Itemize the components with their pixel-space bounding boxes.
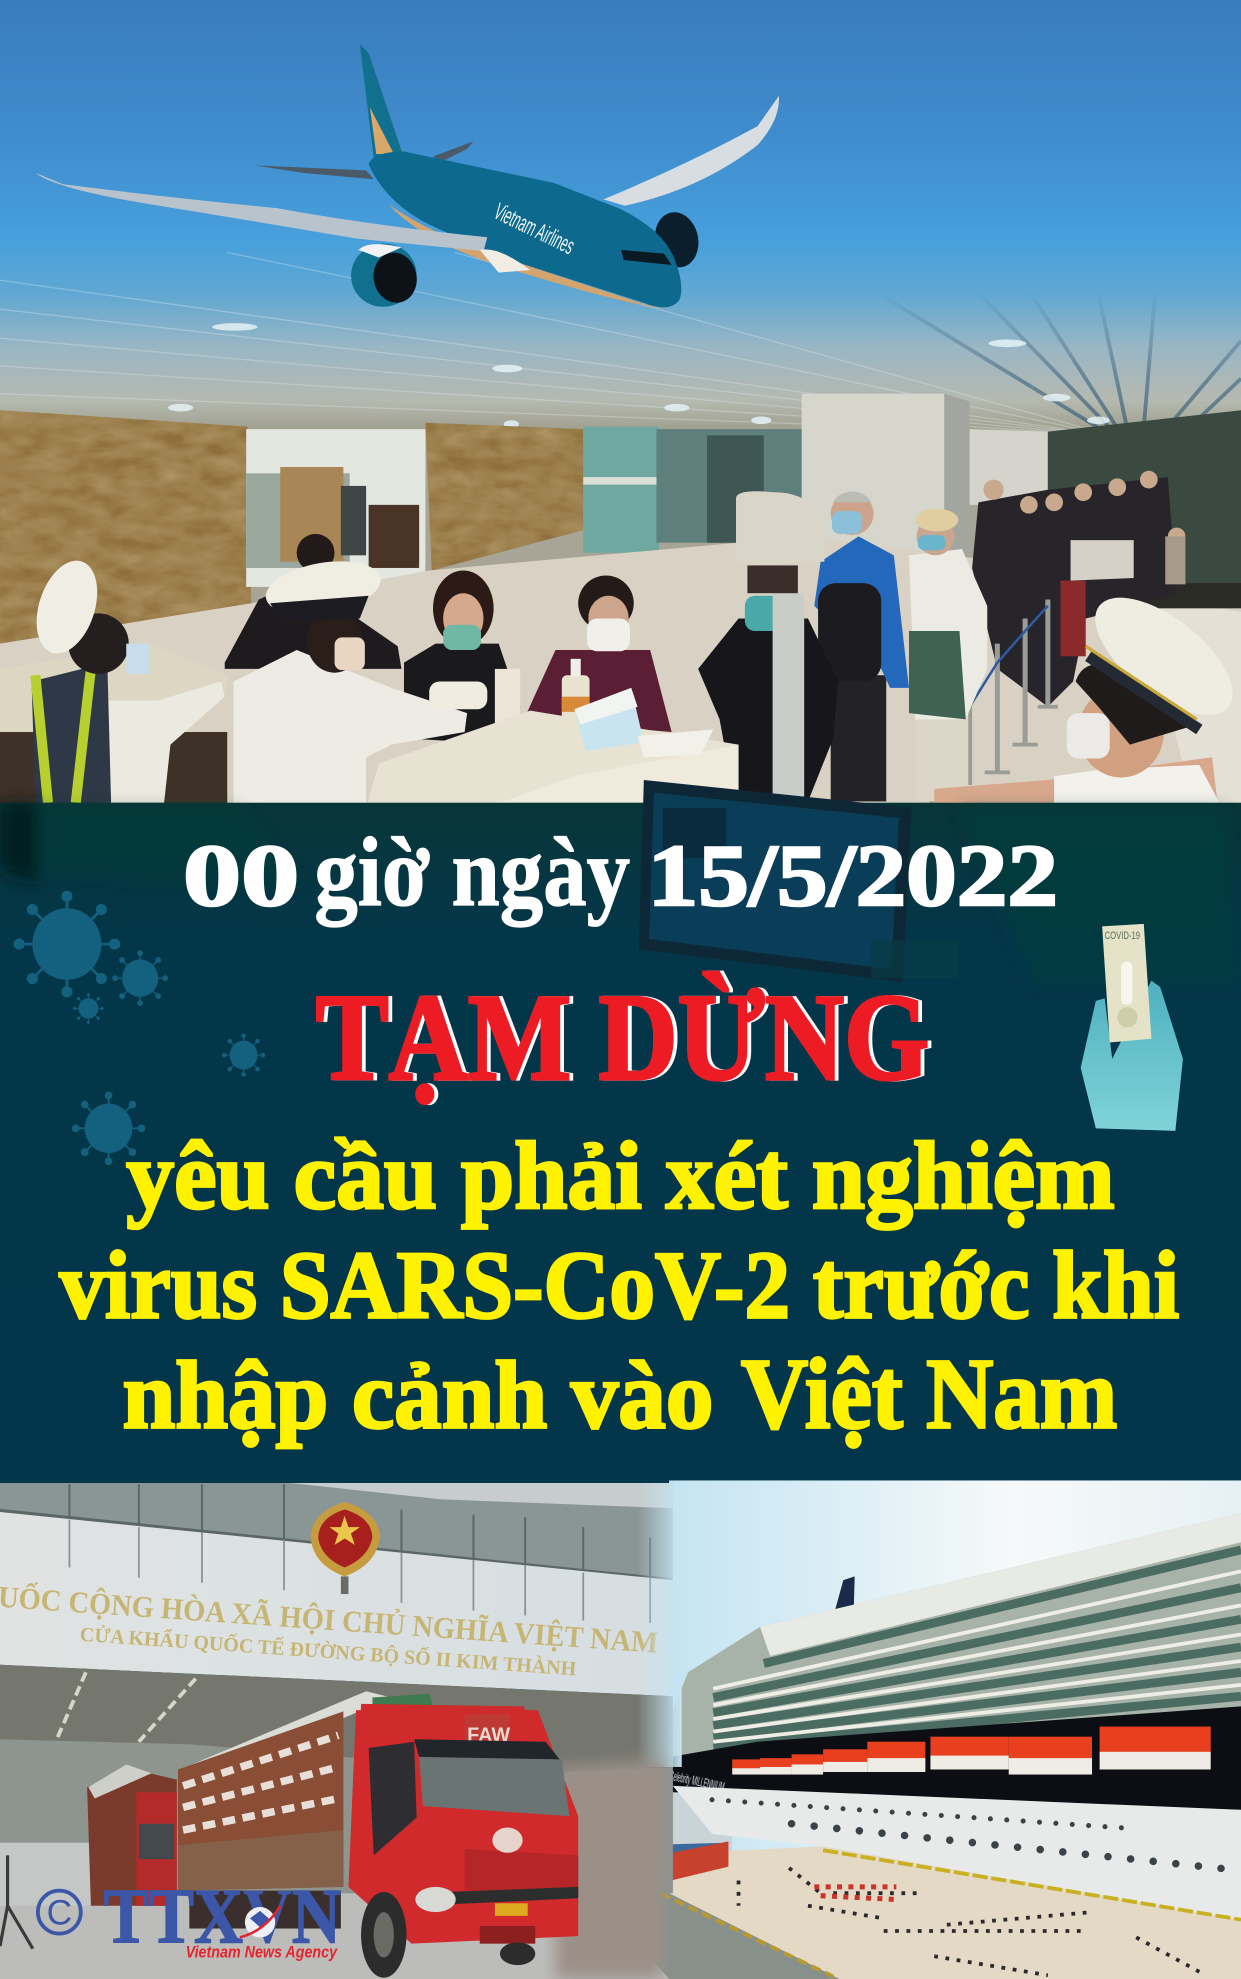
gate sign plate [0,1512,673,1696]
near engine [344,236,424,314]
bottom photo: sky and cruise ship [601,1480,1241,1979]
teal doors and glass [583,427,805,553]
white pillars [802,394,1048,593]
photographer tripod [0,1855,33,1949]
passenger in blue with backpack [814,492,909,801]
bottom photo: sky and cruise ship: Celebrity MILLENNIUM [668,1769,726,1794]
windshield [419,1757,569,1816]
ghosted photo in panel [0,803,1241,984]
yellow subheading: Việt Nam [741,1337,1117,1449]
thermal camera on pole [736,491,824,801]
yellow subheading [59,1123,1179,1449]
stabilisers [255,165,374,179]
title panel [0,780,1241,1480]
wooden trailer [178,1711,343,1891]
lifeboats [732,1727,1211,1775]
passenger in white jacket [909,509,987,801]
quay [601,1846,1241,1979]
glass frames [0,1484,673,1621]
ship superstructure [665,1513,1241,1762]
top photo: airport arrival hall [0,0,1241,808]
ghosted monitor [639,780,959,982]
virus icons [15,892,265,1164]
globe [240,1906,280,1937]
far wing [603,96,779,206]
date line [183,818,1058,927]
tourist buses [621,1824,728,1882]
date line: giờ ngày [314,818,630,927]
wordmark: TTXVN [104,1872,341,1959]
near wing [35,173,487,251]
copyright mark: C [47,1894,72,1933]
gate signage lettering: CỬA KHẨU QUỐC TẾ ĐƯỜNG BỘ SỐ II KIM THÀNH [79,1622,577,1680]
floor [0,536,1241,808]
officer in foreground right [934,576,1241,808]
headline: TẠM DỪNG: TẠM DỪNG [316,969,929,1106]
front counter [366,711,739,808]
passenger behind counter [225,534,401,669]
logo: TTXVN Vietnam News Agency [38,1872,341,1962]
icon: hand holding COVID-19 test: COVID-19 [1105,930,1140,942]
gate signage lettering: UỐC CỘNG HÒA XÃ HỘI CHỦ NGHĨA VIỆT NAM [0,1580,659,1660]
wheels [361,1892,407,1978]
rear truck [87,1764,177,1906]
right-hand fade into sky [638,1483,682,1767]
sanitizer and mask box [562,659,713,757]
passenger in black jacket [698,596,838,801]
dark back corridor [1048,410,1241,593]
big red truck: FAW [467,1725,511,1747]
big red truck [178,1691,578,1978]
balcony decks [713,1550,1241,1747]
yellow subheading: yêu cầu phải xét nghiệm [126,1123,1115,1229]
officer writing at counter [234,553,487,808]
murky fade between truck and ship [555,1761,663,1979]
woman with teal mask [404,570,520,745]
canopy underside [0,1665,673,1773]
airplane: Vietnam Airlines [35,44,779,314]
icon: hand holding COVID-19 test [1081,924,1183,1131]
back room [246,429,425,587]
queue of passengers [972,471,1185,707]
tail fin [360,44,404,158]
yellow subheading: virus SARS-CoV-2 trước khi [59,1233,1179,1339]
ceiling lights [168,323,1110,435]
date line: 00 [183,827,299,925]
ship dark band [656,1706,1241,1810]
left counter [0,644,227,745]
ceiling lines [0,252,1241,442]
grille [465,1849,578,1891]
stanchion posts [932,600,1058,803]
centre marble wall [425,423,583,570]
copyright mark [38,1891,81,1934]
cab [348,1710,578,1944]
crowd on quay [739,1868,1206,1975]
fuselage [369,151,681,307]
portholes [712,1800,1241,1870]
left marble wall [0,410,251,644]
officer with vest [26,553,225,803]
state emblem [311,1502,380,1594]
gate roof glass [0,1483,673,1580]
sky and ceiling background [0,0,1241,435]
cargo load [189,1691,391,1780]
yellow subheading: nhập cảnh vào [122,1342,713,1448]
ship hull [673,1786,1241,1926]
airline name: Vietnam Airlines [490,198,579,260]
woman with white mask [524,576,672,732]
date line: 15/5/2022 [648,827,1058,925]
ship funnel [795,1576,884,1666]
headline: TẠM DỪNG: TẠM DỪNG [319,969,933,1106]
tagline: Vietnam News Agency [186,1944,338,1962]
bottom photo: border gate [0,1483,682,1979]
background hills and road [0,1735,673,1893]
